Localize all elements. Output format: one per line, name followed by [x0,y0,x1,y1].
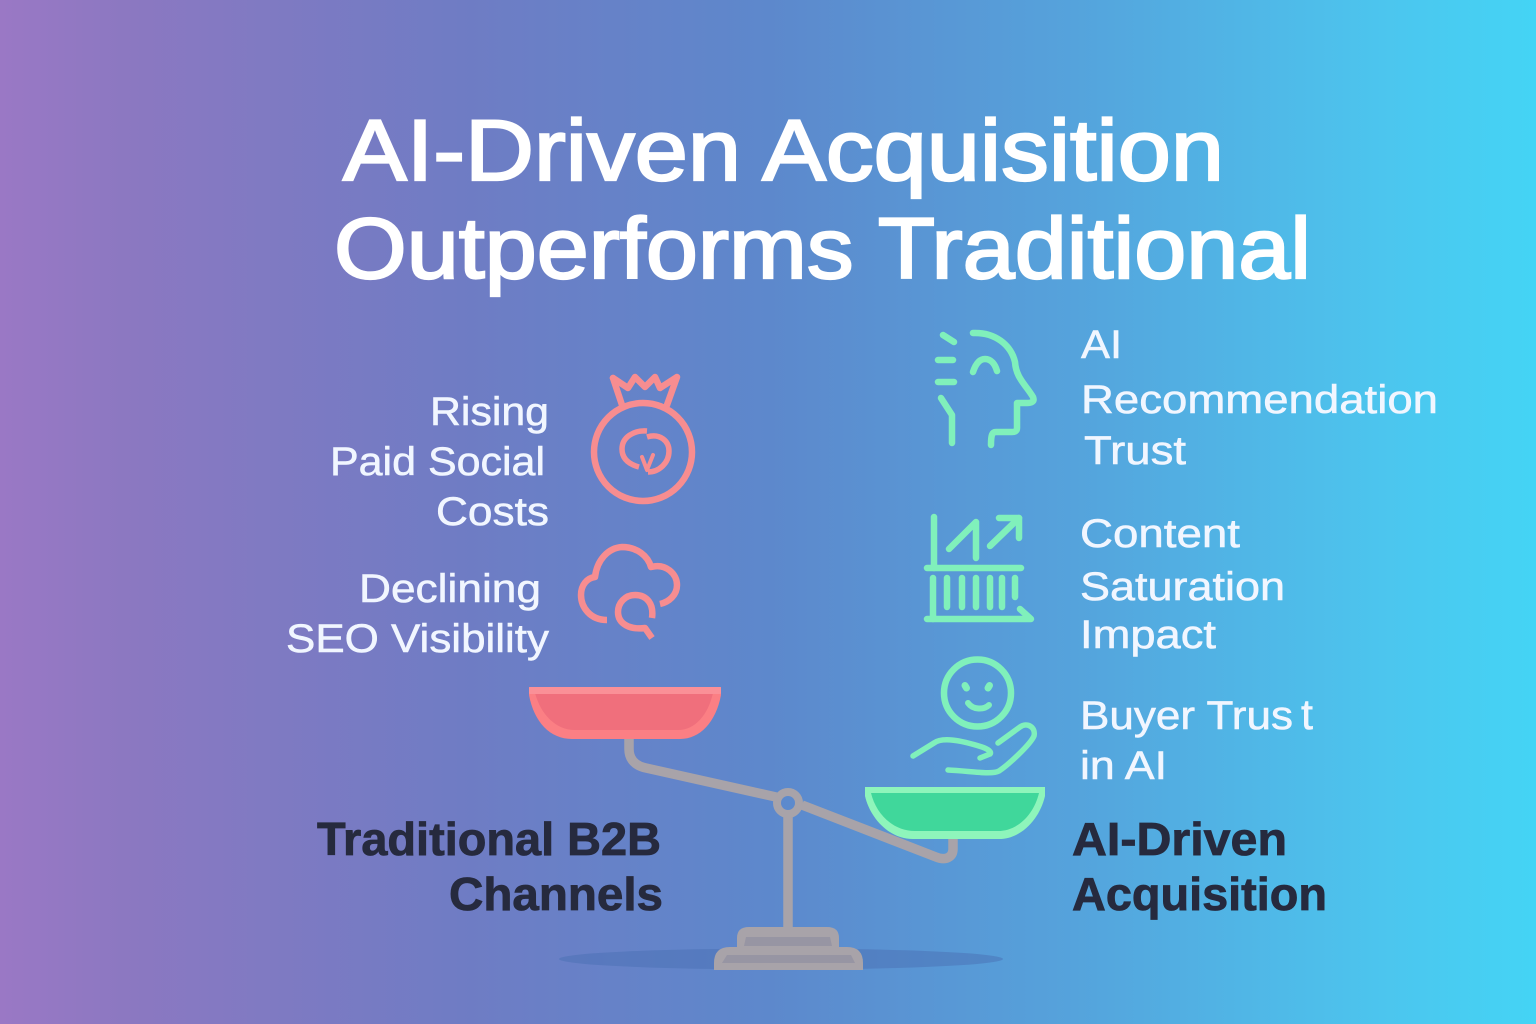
label: Content Saturation Impact [1080,512,1285,657]
label: Buyer Trust in AI [1080,691,1313,788]
label: Rising Paid Social Costs: Costs [436,490,549,534]
right pan: AI-driven [865,787,1045,839]
heading: AI-Driven Acquisition [1072,813,1327,920]
icon: growth chart with bars [927,517,1031,619]
label: AI Recommendation Trust: AI [1081,323,1122,367]
label: Declining SEO Visibility: SEO Visibility [286,617,549,661]
title: Outperforms Traditional [334,201,1311,297]
ground shadow [559,948,1003,970]
label: Declining SEO Visibility [286,567,549,661]
left pan: traditional [529,687,721,739]
label: Content Saturation Impact: Saturation [1080,565,1285,609]
icon: AI head profile [938,333,1034,445]
scale beam and stems [629,738,953,859]
heading: Traditional B2B Channels: Traditional B2B [317,813,661,865]
label: Buyer Trust in AI: in AI [1080,744,1167,788]
icon: money bag with cycle arrow [594,377,692,501]
label: Rising Paid Social Costs: Rising [430,390,549,434]
heading: AI-Driven Acquisition: AI-Driven [1072,813,1287,865]
scale pivot [777,792,799,814]
heading: Traditional B2B Channels: Channels [449,868,663,920]
scale base [714,927,863,970]
label: Content Saturation Impact: Impact [1080,613,1216,657]
label: Buyer Trust in AI: t [1301,691,1313,739]
icon: cloud with magnifier [581,547,677,638]
scale post [783,812,793,930]
balance scale [529,687,1045,970]
title: AI-Driven Acquisition [343,103,1224,199]
icon: smiling face over open hand [913,660,1034,773]
label: Rising Paid Social Costs: Paid Social [330,440,545,484]
label: Buyer Trust in AI: Buyer Trus [1080,694,1293,738]
label: AI Recommendation Trust: Trust [1084,429,1186,473]
label: Declining SEO Visibility: Declining [359,567,541,611]
label: AI Recommendation Trust: Recommendation [1081,378,1438,422]
label: Rising Paid Social Costs [330,390,549,534]
label: AI Recommendation Trust [1081,323,1438,473]
heading: AI-Driven Acquisition: Acquisition [1072,868,1327,920]
title [334,103,1311,297]
label: Content Saturation Impact: Content [1080,512,1240,556]
heading: Traditional B2B Channels [317,813,663,920]
